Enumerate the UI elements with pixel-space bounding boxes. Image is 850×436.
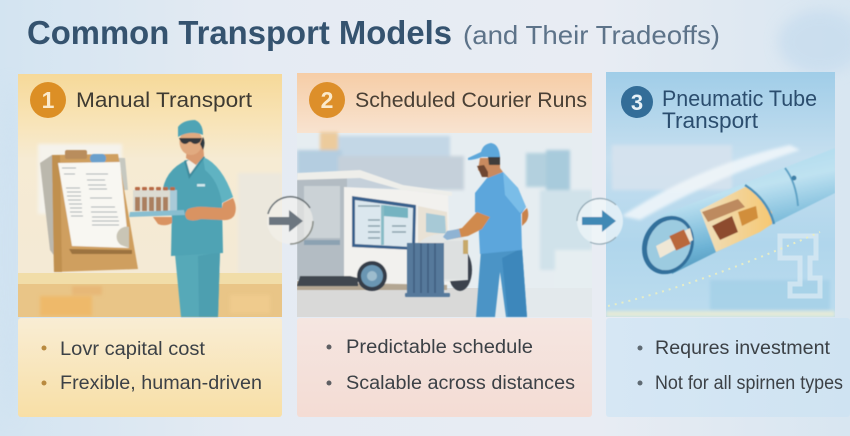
panel 2 tradeoffs: Scalable across distances (346, 373, 575, 394)
title (27, 14, 720, 51)
panel: manual transport (18, 74, 282, 417)
number badge 2: 2 (321, 87, 333, 113)
heading: pneumatic tube transport: Transport (662, 108, 758, 133)
panel 2 tradeoffs (297, 318, 592, 417)
panel 3 illustration background (606, 72, 835, 317)
arrow: panel 1 to panel 2 (267, 197, 313, 244)
icon: clipboard with paperwork (40, 150, 138, 272)
panel 1 tradeoffs: Lovr capital cost (60, 339, 206, 360)
icon: transport cart (405, 234, 468, 297)
panel 3 header (621, 86, 817, 133)
icon: pneumatic tube with carrier (633, 148, 835, 283)
panel 2 illustration background (297, 73, 592, 317)
icon: courier in blue uniform (443, 143, 528, 317)
panel 3 tradeoffs: Not for all spirnen types (655, 373, 843, 394)
panel 1 tradeoffs (18, 318, 282, 417)
arrow: panel 2 to panel 3 (577, 198, 623, 244)
panel: pneumatic tube transport (606, 72, 850, 417)
panel 3 tradeoffs: Requres investment (655, 338, 831, 359)
panel 1 header (30, 82, 252, 118)
panel 1 tradeoffs: Frexible, human-driven (60, 373, 262, 394)
heading: pneumatic tube transport: Pneumatic Tube (662, 86, 817, 111)
panel 3 tradeoffs (606, 318, 850, 417)
number badge 3: 3 (631, 90, 643, 115)
title: (and Their Tradeoffs) (463, 20, 720, 50)
panel 2 header (309, 82, 587, 118)
heading: scheduled courier runs: Scheduled Courier Runs (355, 89, 587, 112)
number badge 1 (30, 82, 66, 118)
number badge 2 (309, 82, 345, 118)
heading: manual transport: Manual Transport (76, 89, 252, 112)
panel 1 illustration background (18, 74, 282, 317)
title: Common Transport Models (27, 14, 452, 51)
icon: sample vials (133, 187, 177, 211)
number badge 3 (621, 86, 653, 118)
icon: courier truck (297, 170, 472, 291)
panel: scheduled courier runs (297, 73, 592, 417)
number badge 1: 1 (42, 87, 55, 113)
panel 2 tradeoffs: Predictable schedule (346, 337, 533, 358)
icon: technician with sample tray (129, 120, 236, 317)
